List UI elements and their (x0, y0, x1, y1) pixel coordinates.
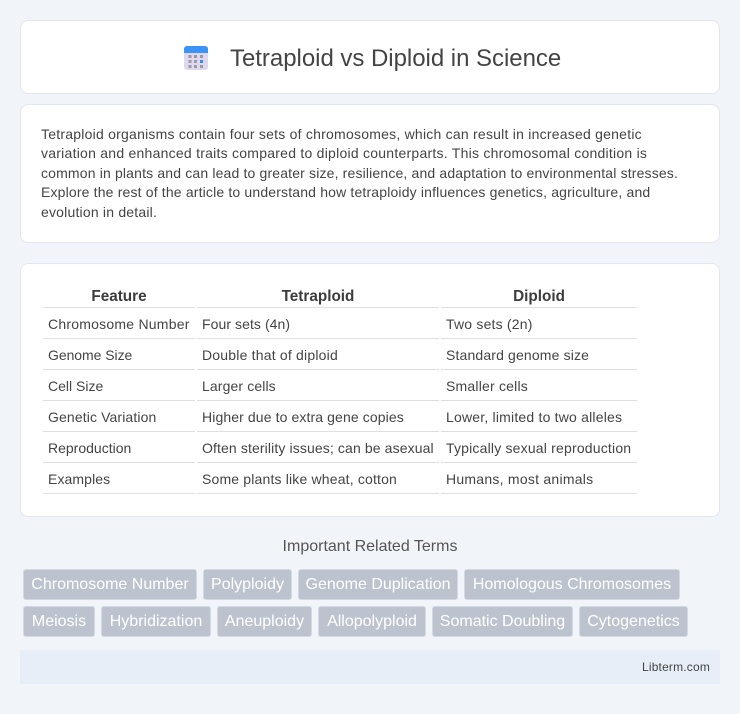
text block: introduction: Explore the rest of the article to understand how tetraploidy influences genetics, agriculture, and (41, 184, 650, 200)
table: tetraploid vs diploid: Reproduction (48, 440, 131, 456)
tag group: related terms: Cytogenetics (587, 613, 680, 630)
table: tetraploid vs diploid (43, 288, 637, 494)
text block: introduction: Tetraploid organisms contain four sets of chromosomes, which can result in increased genetic (41, 126, 642, 142)
table: tetraploid vs diploid: Genome Size (48, 347, 132, 363)
panel: comparison table (20, 263, 720, 517)
text block: introduction (41, 126, 678, 220)
table: tetraploid vs diploid: Chromosome Number (48, 316, 190, 332)
text block: introduction: variation and enhanced traits compared to diploid counterparts. This chromosomal condition is (41, 145, 647, 161)
table: tetraploid vs diploid: Two sets (2n) (446, 316, 533, 332)
tag group: related terms: Allopolyploid (327, 613, 417, 630)
table: tetraploid vs diploid: Smaller cells (446, 378, 528, 394)
table: tetraploid vs diploid: Larger cells (202, 378, 276, 394)
table: tetraploid vs diploid: Standard genome size (446, 347, 589, 363)
table: tetraploid vs diploid: Feature (91, 288, 147, 305)
heading: related terms: Important Related Terms (283, 538, 457, 555)
table: tetraploid vs diploid: Tetraploid (282, 288, 354, 305)
table: tetraploid vs diploid: Some plants like wheat, cotton (202, 471, 397, 487)
tag group: related terms: Chromosome Number (31, 576, 189, 593)
table: tetraploid vs diploid: Typically sexual reproduction (446, 440, 631, 456)
tag group: related terms (23, 569, 688, 637)
table: tetraploid vs diploid: Often sterility issues; can be asexual (202, 440, 434, 456)
footer bar (20, 650, 720, 684)
tag group: related terms: Polyploidy (211, 576, 284, 593)
table: tetraploid vs diploid: Diploid (513, 288, 565, 305)
tag group: related terms: Somatic Doubling (440, 613, 565, 630)
tag group: related terms: Genome Duplication (306, 576, 450, 593)
text block: introduction: common in plants and can lead to greater size, resilience, and adaptation to environmental stresses. (41, 165, 678, 181)
table: tetraploid vs diploid: Humans, most animals (446, 471, 593, 487)
footer credit: Libterm.com (642, 660, 710, 674)
table: tetraploid vs diploid: Examples (48, 471, 110, 487)
tag group: related terms: Hybridization (110, 613, 202, 630)
tag group: related terms: Homologous Chromosomes (473, 576, 671, 593)
table: tetraploid vs diploid: Double that of diploid (202, 347, 338, 363)
title: Tetraploid vs Diploid in Science (230, 45, 561, 72)
tag group: related terms: Aneuploidy (225, 613, 304, 630)
table: tetraploid vs diploid: Higher due to extra gene copies (202, 409, 404, 425)
table: tetraploid vs diploid: Four sets (4n) (202, 316, 290, 332)
table: tetraploid vs diploid: Cell Size (48, 378, 103, 394)
text block: introduction: evolution in detail. (41, 204, 157, 220)
panel: introduction (20, 104, 720, 243)
table: tetraploid vs diploid: Genetic Variation (48, 409, 156, 425)
icon: calendar grid (184, 46, 208, 70)
table: tetraploid vs diploid: Lower, limited to two alleles (446, 409, 622, 425)
tag group: related terms: Meiosis (32, 613, 86, 630)
panel: title header (20, 20, 720, 94)
